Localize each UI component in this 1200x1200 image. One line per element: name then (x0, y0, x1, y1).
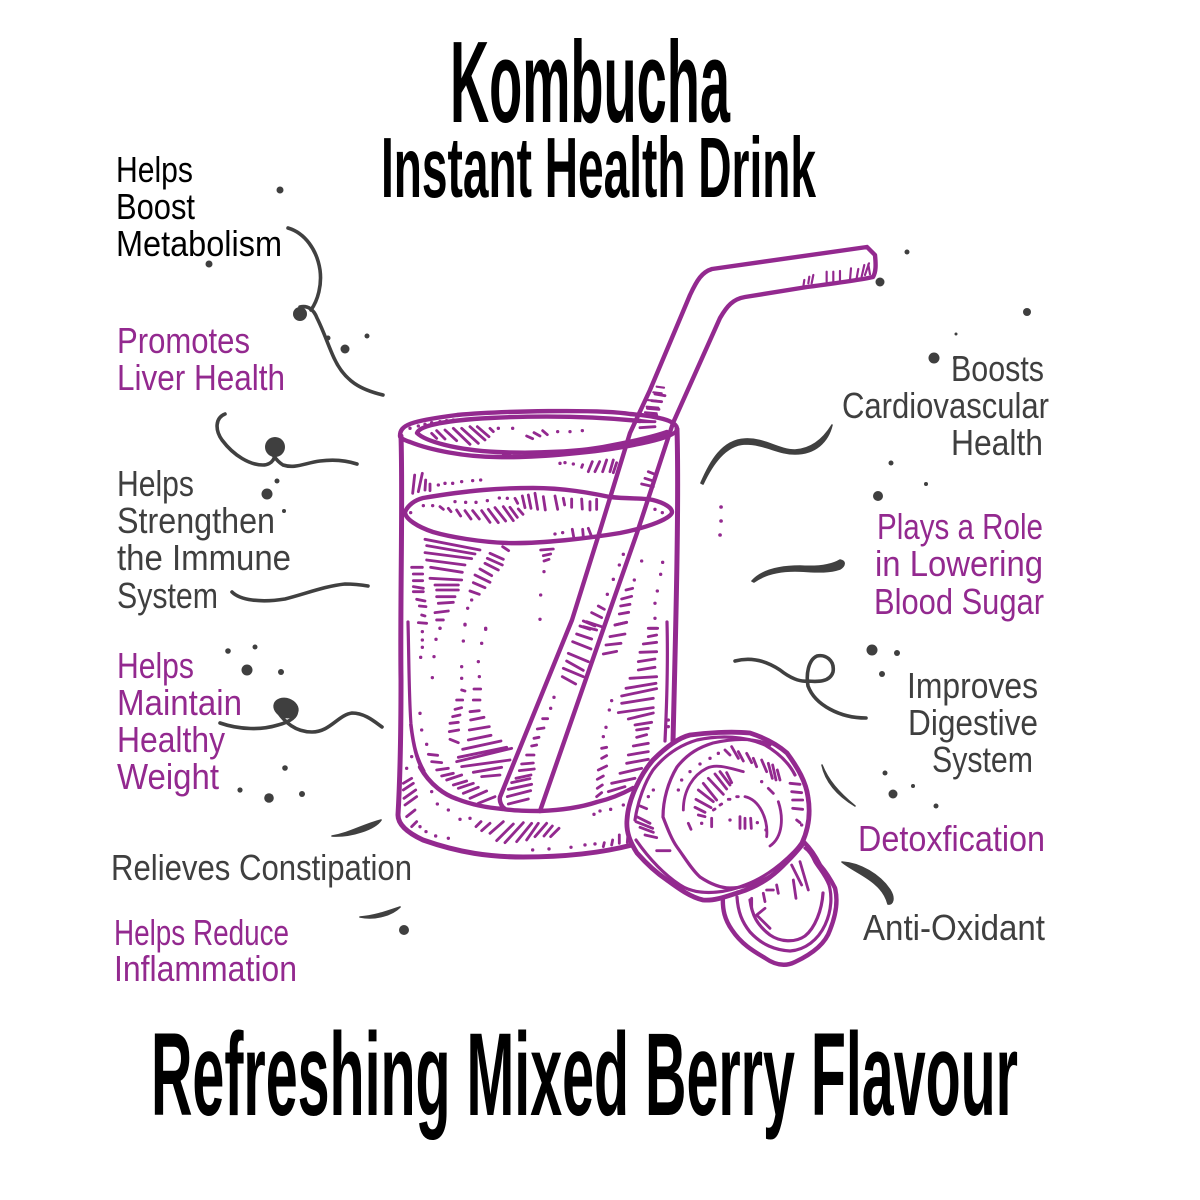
label: Promotes Liver Health: Promotes (117, 320, 250, 361)
label: Plays a Role in Lowering Blood Sugar: Plays a Role (877, 506, 1043, 547)
connector: blood sugar (752, 560, 844, 582)
label: Helps Strengthen the Immune System: the Immune (117, 537, 291, 578)
label: Promotes Liver Health: Liver Health (117, 357, 285, 398)
connector: immune (217, 414, 357, 466)
connector: cardio (701, 425, 832, 484)
label: Helps Boost Metabolism (116, 149, 282, 264)
small slice detail (752, 862, 808, 928)
blob: weight loop (270, 694, 302, 722)
label: Relieves Constipation: Relieves Constipation (111, 847, 412, 888)
dots: outside glass (720, 507, 721, 535)
label: Anti-Oxidant: Anti-Oxidant (863, 907, 1045, 948)
label: Helps Reduce Inflammation: Inflammation (114, 948, 297, 989)
label: Improves Digestive System: Improves (907, 665, 1038, 706)
large slice (627, 732, 809, 900)
small slice (723, 842, 836, 965)
illustration: berry slices (627, 732, 836, 965)
label: Helps Boost Metabolism: Helps (116, 149, 193, 190)
label: Boosts Cardiovascular Health: Boosts (951, 348, 1044, 389)
label: Plays a Role in Lowering Blood Sugar (874, 506, 1044, 622)
label: Helps Boost Metabolism: Boost (116, 186, 195, 227)
label: Helps Strengthen the Immune System: Helps (117, 463, 194, 504)
label: Improves Digestive System: Digestive (908, 702, 1038, 743)
glass rim (400, 411, 677, 457)
dots: upper glass (410, 420, 663, 628)
label: Improves Digestive System (907, 665, 1038, 780)
connector: system (232, 584, 368, 601)
label: Helps Maintain Healthy Weight: Weight (117, 756, 219, 797)
label: Helps Maintain Healthy Weight: Maintain (117, 682, 242, 723)
subtitle: Instant Health Drink: Instant Health Drink (381, 121, 816, 216)
text: Kombucha (450, 17, 731, 147)
label: Helps Boost Metabolism: Metabolism (116, 223, 282, 264)
glass walls and base (398, 429, 678, 857)
large slice centre detail (636, 747, 803, 851)
label: Boosts Cardiovascular Health: Health (951, 422, 1043, 463)
blob: metabolism loop (293, 307, 307, 321)
label: Helps Maintain Healthy Weight (117, 645, 242, 797)
straw (500, 247, 876, 811)
squiggle connectors (217, 228, 893, 918)
label: Promotes Liver Health (117, 320, 285, 398)
connector: detox (822, 765, 855, 806)
connector: digestive (735, 656, 866, 718)
illustration: glass with straw (398, 247, 876, 857)
hatching: lower glass (403, 622, 668, 850)
label: Plays a Role in Lowering Blood Sugar: Blood Sugar (874, 581, 1044, 622)
connector: anti-oxidant (842, 862, 893, 904)
connector: constipation (332, 820, 381, 836)
straw upper hatching (640, 247, 870, 422)
label: Helps Maintain Healthy Weight: Healthy (117, 719, 225, 760)
label: Plays a Role in Lowering Blood Sugar: in Lowering (875, 543, 1043, 584)
connector: inflammation (360, 907, 400, 918)
label: Boosts Cardiovascular Health: Cardiovascular (842, 385, 1049, 426)
label: Boosts Cardiovascular Health (842, 348, 1049, 463)
connector: metabolism (288, 228, 383, 395)
label: Helps Maintain Healthy Weight: Helps (117, 645, 194, 686)
glass inner base curve (420, 767, 633, 811)
dots: lower glass (407, 625, 668, 850)
hatching: upper glass (410, 394, 665, 629)
liquid surface (405, 488, 672, 543)
label: Helps Reduce Inflammation (114, 912, 297, 989)
decorative dots (206, 186, 1031, 935)
label: Helps Strengthen the Immune System (117, 463, 291, 616)
label: Helps Strengthen the Immune System: System (117, 575, 218, 616)
label: Helps Reduce Inflammation: Helps Reduce (114, 912, 289, 953)
connector: weight (220, 710, 382, 732)
label: Helps Strengthen the Immune System: Strengthen (117, 500, 275, 541)
blob: immune loop (265, 437, 285, 457)
label: Detoxfication: Detoxfication (858, 818, 1045, 859)
label: Improves Digestive System: System (932, 739, 1033, 780)
